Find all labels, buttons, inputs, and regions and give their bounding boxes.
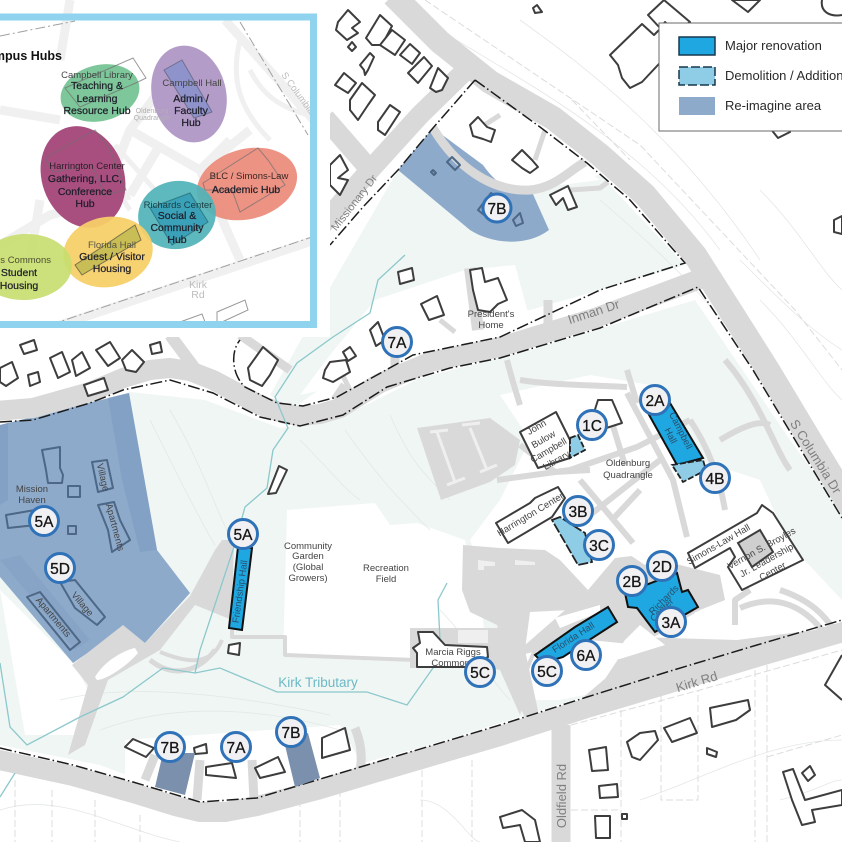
badge 2D: 2D bbox=[652, 559, 672, 576]
inset hub: social and community: Richards Center bbox=[144, 200, 212, 211]
building and place labels: Community bbox=[284, 541, 332, 552]
badge 5C Commons: 5C bbox=[470, 665, 490, 682]
inset hub: guest and visitor housing bbox=[64, 216, 153, 288]
building and place labels: Center bbox=[648, 596, 676, 624]
building and place labels: Quadrangle bbox=[603, 470, 653, 481]
building and place labels: Haven bbox=[18, 495, 46, 506]
building and place labels: Field bbox=[376, 574, 396, 585]
building and place labels: Bulow bbox=[530, 429, 558, 451]
inset hub: admin and faculty: Campbell Hall bbox=[162, 78, 222, 89]
building and place labels: Vernon S. Broyles bbox=[726, 525, 798, 572]
inset hub: student housing bbox=[0, 232, 74, 302]
building and place labels: John bbox=[525, 418, 548, 438]
houses: south of Kirk Rd bbox=[500, 655, 842, 842]
building and place labels bbox=[16, 309, 798, 669]
small buildings by Friendship Hall bbox=[228, 466, 287, 655]
badge 3C: 3C bbox=[589, 538, 609, 555]
building and place labels: Garden bbox=[292, 551, 324, 562]
legend swatch: demolition / addition bbox=[679, 67, 715, 85]
inset road labels: Kirk bbox=[189, 279, 208, 291]
inset hub: guest and visitor housing: Housing bbox=[93, 263, 131, 275]
building and place labels: Village bbox=[69, 590, 95, 619]
building and place labels: Campbell bbox=[666, 410, 694, 451]
badge 1C: 1C bbox=[582, 418, 602, 435]
building: Marcia Riggs Commons bbox=[413, 632, 488, 667]
houses: north-east bbox=[533, 0, 842, 234]
re-imagine area: north 7B bbox=[398, 128, 549, 242]
badge 6A: 6A bbox=[577, 648, 596, 665]
badge 5D bbox=[46, 554, 74, 582]
building: Campbell Library bbox=[520, 400, 622, 468]
building: demolition addition 3B 3C bbox=[552, 517, 592, 565]
residential houses: north-west bbox=[330, 10, 448, 195]
building and place labels: Friendship Hall bbox=[231, 560, 250, 624]
building and place labels: Center bbox=[758, 560, 788, 584]
inset panel: campus hubs bbox=[0, 0, 330, 337]
building and place labels: Richards bbox=[647, 583, 682, 617]
badge 5C Commons bbox=[466, 658, 494, 686]
inset hub: teaching and learning: Teaching & bbox=[71, 80, 123, 92]
badge 7A south bbox=[222, 732, 250, 762]
campus walkways and parking bbox=[410, 360, 835, 722]
building and place labels: Village bbox=[94, 462, 111, 492]
badge 2B bbox=[618, 566, 646, 596]
inset road labels: S Columbia bbox=[279, 70, 317, 117]
road labels: Kirk Rd bbox=[674, 668, 719, 695]
badge 5A Mission Haven bbox=[30, 506, 58, 536]
buildings in re-imagine area bbox=[6, 447, 130, 650]
streams bbox=[0, 255, 447, 797]
building and place labels: (Global bbox=[293, 562, 323, 573]
houses: along Inman Dr bbox=[248, 268, 507, 386]
badge 4B: 4B bbox=[706, 471, 724, 488]
badge 7B south east bbox=[276, 718, 306, 746]
building and place labels: President's bbox=[468, 309, 515, 320]
building: Richards Center bbox=[625, 573, 698, 632]
inset hub: gathering and conference bbox=[40, 126, 127, 228]
legend: Major renovation bbox=[725, 38, 822, 53]
inset hub: admin and faculty: Hub bbox=[181, 117, 201, 129]
badge 2A: 2A bbox=[646, 393, 665, 410]
badge 1C bbox=[578, 410, 606, 440]
badge 2A bbox=[640, 386, 670, 414]
building and place labels: Hall bbox=[662, 426, 679, 446]
badge 7B south east: 7B bbox=[282, 725, 300, 742]
inset hub: academic: Academic Hub bbox=[212, 184, 280, 196]
inset road labels bbox=[189, 70, 317, 301]
inset hub: admin and faculty: Faculty bbox=[174, 105, 209, 117]
legend swatch: re-imagine area bbox=[679, 97, 715, 115]
badge 6A bbox=[572, 640, 600, 670]
badge 2D bbox=[648, 552, 676, 580]
building and place labels: Apartments bbox=[33, 595, 73, 640]
water label: Kirk Tributary bbox=[278, 675, 358, 690]
inset hub: admin and faculty: Admin / bbox=[173, 93, 209, 105]
building and place labels: Campbell bbox=[529, 436, 569, 466]
building: Harrington Center bbox=[496, 487, 565, 543]
building: Simons-Law Hall and Leadership Center bbox=[688, 505, 803, 590]
badge 7A south: 7A bbox=[227, 740, 246, 757]
building and place labels: Home bbox=[478, 320, 504, 331]
building: demolition addition 4B bbox=[672, 460, 706, 482]
badge 5C Florida: 5C bbox=[537, 664, 557, 681]
badge 4B bbox=[700, 464, 730, 492]
building and place labels: Jr. Leadership bbox=[738, 542, 796, 580]
inset hub: social and community: Hub bbox=[167, 234, 187, 246]
legend: Re-imagine area bbox=[725, 98, 822, 113]
inset hub: student housing: Student bbox=[1, 267, 37, 279]
badge 7B south west bbox=[156, 732, 184, 762]
inset hub: social and community bbox=[138, 180, 216, 250]
inset hub: teaching and learning bbox=[60, 57, 147, 122]
building and place labels: Commons bbox=[431, 658, 475, 669]
badge 2B: 2B bbox=[623, 574, 641, 591]
inset quadrangle label: Oldenburg bbox=[136, 108, 168, 115]
badge 3B bbox=[564, 496, 592, 526]
building and place labels: Library bbox=[541, 449, 572, 473]
numbered project badges bbox=[30, 194, 730, 762]
badge 5A Friendship: 5A bbox=[234, 527, 253, 544]
inset hub: teaching and learning: Resource Hub bbox=[63, 105, 131, 117]
building and place labels: Growers) bbox=[288, 573, 328, 584]
road labels: Oldfield Rd bbox=[554, 764, 569, 828]
badge 3A bbox=[656, 608, 686, 636]
inset hub: teaching and learning: Learning bbox=[77, 93, 118, 105]
badge 5A Friendship bbox=[228, 520, 258, 548]
houses inside north campus bbox=[431, 117, 577, 226]
badge 3C bbox=[584, 530, 614, 560]
inset hub: gathering and conference: Harrington Center bbox=[49, 161, 125, 172]
building and place labels: Marcia Riggs bbox=[425, 647, 481, 658]
badge 3B: 3B bbox=[569, 504, 587, 521]
legend swatch: major renovation bbox=[679, 37, 715, 55]
building: Campbell Hall major renovation bbox=[648, 403, 703, 465]
badge 7B north bbox=[483, 194, 511, 222]
inset hub: gathering and conference: Gathering, LLC, bbox=[48, 173, 122, 185]
inset quadrangle label: Quadrangle bbox=[134, 115, 170, 122]
inset hub: academic bbox=[197, 148, 298, 220]
inset hub: social and community: Social & bbox=[158, 210, 196, 222]
badge 5D: 5D bbox=[50, 561, 70, 578]
badge 7A north bbox=[382, 328, 412, 356]
badge 5A Mission Haven: 5A bbox=[35, 514, 54, 531]
inset quadrangle label bbox=[134, 108, 170, 122]
inset hub: gathering and conference: Conference bbox=[58, 186, 112, 198]
badge 7A north: 7A bbox=[388, 335, 407, 352]
inset hub: guest and visitor housing: Florida Hall bbox=[88, 240, 136, 251]
badge 7B south west: 7B bbox=[161, 740, 179, 757]
road labels: Inman Dr bbox=[566, 296, 622, 327]
houses: south campus bbox=[125, 728, 350, 778]
inset hub: social and community: Community bbox=[150, 222, 204, 234]
inset hub: admin and faculty bbox=[151, 46, 227, 142]
legend bbox=[659, 23, 842, 131]
building and place labels: Florida Hall bbox=[550, 620, 597, 656]
inset hub: student housing: Housing bbox=[0, 280, 38, 292]
building and place labels: Mission bbox=[16, 484, 48, 495]
legend: Demolition / Addition bbox=[725, 68, 842, 83]
building and place labels: Harrington Center bbox=[496, 491, 566, 539]
south 7B areas bbox=[155, 733, 320, 795]
building and place labels: Recreation bbox=[363, 563, 409, 574]
road labels bbox=[329, 173, 842, 828]
building: Friendship Hall bbox=[229, 547, 252, 630]
road labels: Missionary Dr bbox=[329, 173, 380, 233]
building and place labels: Apartments bbox=[103, 502, 126, 552]
re-imagine area: west bbox=[0, 393, 190, 663]
building and place labels: Simons-Law Hall bbox=[685, 522, 752, 567]
inset hub: academic: BLC / Simons-Law bbox=[210, 171, 288, 182]
building: Florida Hall bbox=[535, 607, 617, 663]
badge 5C Florida bbox=[532, 656, 562, 686]
building and place labels: Oldenburg bbox=[606, 458, 650, 469]
inset road labels: Rd bbox=[191, 289, 205, 301]
badge 7B north: 7B bbox=[488, 201, 506, 218]
houses: north-west row bbox=[0, 340, 162, 396]
inset hub: teaching and learning: Campbell Library bbox=[61, 70, 133, 81]
inset hub: guest and visitor housing: Guest / Visitor bbox=[79, 251, 145, 263]
inset hub: gathering and conference: Hub bbox=[75, 198, 95, 210]
badge 3A: 3A bbox=[662, 615, 681, 632]
